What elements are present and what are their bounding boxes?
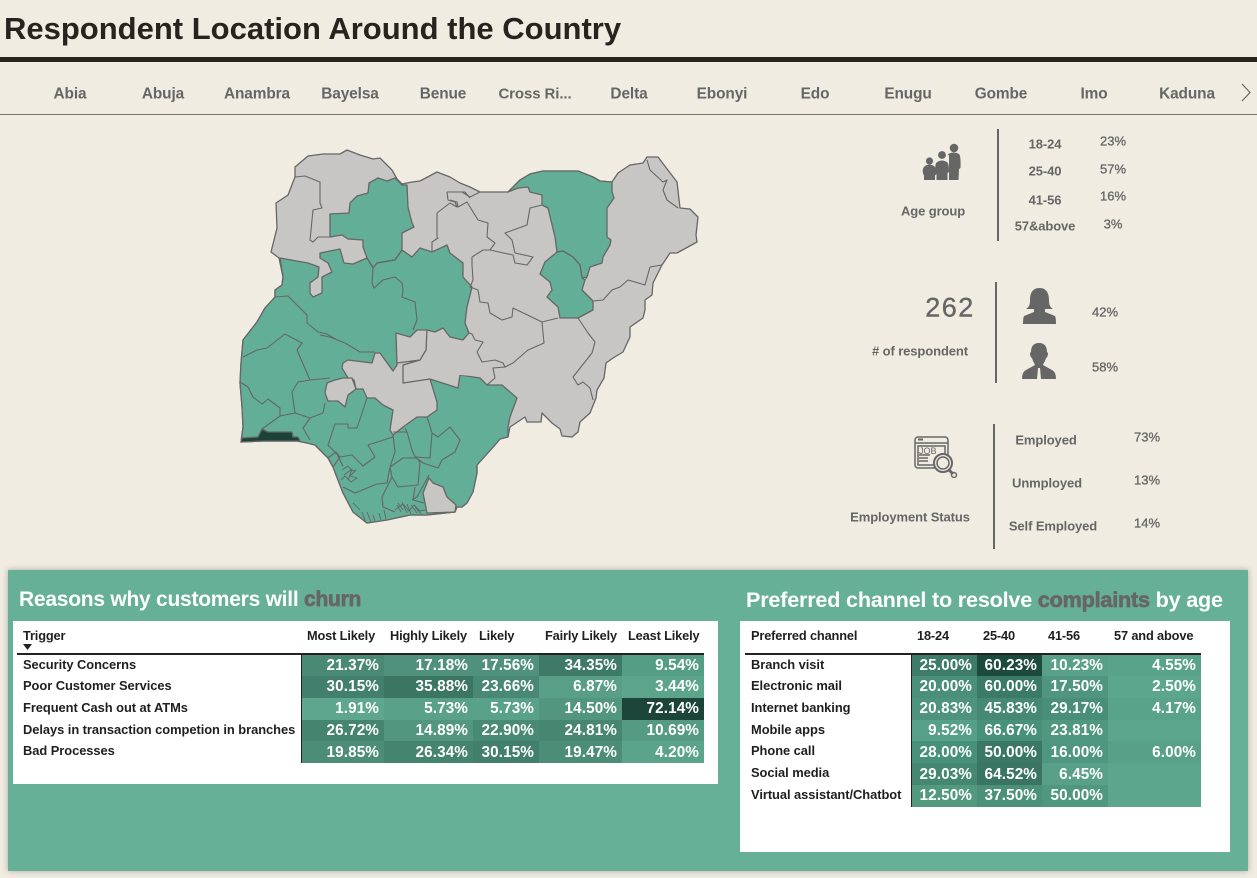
panel: churn table: 4.20% — [655, 744, 699, 761]
label: employment status: Employment Status — [850, 510, 970, 524]
panel: churn table: 35.88% — [416, 678, 468, 695]
state slicer tabs: Delta — [610, 85, 648, 102]
panel: complaints table: 4.17% — [1152, 700, 1196, 717]
panel: churn table: Most Likely — [307, 628, 375, 643]
panel: churn table: Bad Processes — [23, 743, 115, 758]
icon: man — [1022, 343, 1056, 379]
state slicer tabs: Abuja — [142, 85, 184, 102]
panel: tables background — [8, 570, 1248, 871]
heading: complaints: Preferred channel to resolve complaints by age — [746, 587, 1223, 612]
row: self employed: Self Employed — [1009, 518, 1097, 534]
map: Nigeria states — [239, 149, 699, 524]
panel: complaints table: 20.00% — [920, 678, 972, 695]
divider — [993, 424, 995, 549]
panel: complaints table: 29.17% — [1051, 700, 1103, 717]
state slicer tabs: Enugu — [884, 85, 932, 102]
panel: complaints table: 4.55% — [1152, 657, 1196, 674]
age group block: 23% — [1100, 134, 1126, 148]
row: 18-24: 18-24 — [1029, 136, 1061, 152]
panel: complaints table: Mobile apps — [751, 722, 825, 737]
panel: complaints table: 6.00% — [1152, 744, 1196, 761]
panel: churn table: 5.73% — [424, 700, 468, 717]
panel: churn table: 17.56% — [482, 657, 534, 674]
dark highlight: Lagos — [241, 429, 300, 442]
panel: complaints table: Phone call — [751, 743, 815, 758]
label: age group: Age group — [901, 204, 965, 218]
panel: churn table: 24.81% — [565, 722, 617, 739]
panel: churn table: 26.34% — [416, 744, 468, 761]
panel: churn table — [13, 621, 718, 784]
icon: family — [922, 144, 961, 180]
panel: complaints table: 45.83% — [985, 700, 1037, 717]
state slicer tabs: Bayelsa — [321, 85, 379, 102]
panel: complaints table: 10.23% — [1051, 657, 1103, 674]
gray: south-west inland state — [325, 378, 356, 407]
green: south-west and central states — [240, 245, 517, 523]
panel: complaints table: 20.83% — [920, 700, 972, 717]
panel: complaints table: 12.50% — [920, 787, 972, 804]
panel: complaints table: 29.03% — [920, 766, 972, 783]
panel: churn table: 6.87% — [573, 678, 617, 695]
respondent block — [872, 282, 1118, 383]
state slicer tabs: Edo — [801, 85, 829, 102]
panel: churn table: Trigger — [23, 628, 65, 643]
share: men: 58% — [1092, 360, 1118, 374]
age group block: 16% — [1100, 188, 1126, 204]
panel: complaints table: 18-24 — [917, 628, 949, 643]
panel: complaints table: 60.00% — [985, 678, 1037, 695]
country base shape — [240, 150, 698, 523]
state slicer tabs: Ebonyi — [697, 85, 747, 102]
panel: complaints table: 37.50% — [985, 787, 1037, 804]
row: unemployed: Unmployed — [1012, 476, 1082, 490]
age group block: 3% — [1104, 216, 1122, 232]
panel: churn table: 19.85% — [327, 744, 379, 761]
divider — [997, 129, 999, 241]
row: employed: Employed — [1015, 432, 1077, 448]
panel: complaints table: Electronic mail — [751, 678, 842, 693]
respondent count: 262 — [925, 292, 975, 322]
employment block: 73% — [1134, 430, 1160, 444]
row: 25-40: 25-40 — [1029, 164, 1061, 178]
panel: churn table: 23.66% — [482, 678, 534, 695]
state slicer tabs: Anambra — [224, 85, 290, 102]
panel: complaints table — [740, 621, 1230, 852]
panel: churn table: 30.15% — [482, 744, 534, 761]
state slicer tabs: Cross Ri... — [498, 86, 572, 102]
share: women: 42% — [1092, 304, 1118, 320]
state slicer tabs: Benue — [420, 85, 466, 102]
panel: churn table: 26.72% — [327, 722, 379, 739]
panel: churn table: Security Concerns — [23, 657, 136, 672]
panel: churn table: 19.47% — [565, 744, 617, 761]
title rule — [0, 57, 1257, 62]
panel: complaints table: 6.45% — [1059, 766, 1103, 783]
panel: churn table: 1.91% — [335, 700, 379, 717]
panel: churn table: 22.90% — [482, 722, 534, 739]
panel: churn table: 14.89% — [416, 722, 468, 739]
green: north-central state — [330, 178, 414, 268]
panel: complaints table: 60.23% — [985, 657, 1037, 674]
panel: churn table: 30.15% — [327, 678, 379, 695]
heading: churn: Reasons why customers will churn — [19, 588, 361, 611]
green: north-east state — [508, 171, 614, 278]
panel: complaints table: 57 and above — [1114, 628, 1193, 643]
panel: churn table: Highly Likely — [390, 628, 467, 643]
panel: complaints table: 66.67% — [985, 722, 1037, 739]
age group block: 57% — [1100, 162, 1126, 176]
state slicer tabs: Imo — [1080, 85, 1108, 102]
row: 57 and above: 57&above — [1015, 218, 1075, 234]
gray: southern state — [423, 478, 456, 513]
panel: complaints table: 16.00% — [1051, 744, 1103, 761]
panel: complaints table: 28.00% — [920, 744, 972, 761]
state slicer tabs: Gombe — [975, 85, 1027, 102]
title: Respondent Location Around the Country — [4, 11, 621, 46]
age group block — [901, 129, 1126, 241]
panel: churn table: 5.73% — [490, 700, 534, 717]
state slicer tabs: Kaduna — [1159, 85, 1215, 102]
panel: churn table: 21.37% — [327, 657, 379, 674]
panel: complaints table: 50.00% — [985, 744, 1037, 761]
panel: complaints table: 50.00% — [1051, 787, 1103, 804]
panel: complaints table: Internet banking — [751, 700, 850, 715]
panel: complaints table: 25.00% — [920, 657, 972, 674]
panel: complaints table: 41-56 — [1048, 628, 1080, 643]
icon: job search — [914, 436, 958, 478]
label: respondents: # of respondent — [872, 344, 968, 358]
gray: central states — [342, 328, 472, 435]
state slicer tabs — [0, 62, 1257, 115]
panel: complaints table: 2.50% — [1152, 678, 1196, 695]
icon: job search: JOB — [919, 446, 937, 456]
panel: complaints table: Social media — [751, 765, 829, 780]
panel: churn table: 9.54% — [655, 657, 699, 674]
panel: churn table: Likely — [479, 628, 514, 643]
panel: complaints table: 17.50% — [1051, 678, 1103, 695]
panel: complaints table: 23.81% — [1051, 722, 1103, 739]
row: 41-56: 41-56 — [1029, 192, 1061, 208]
panel: churn table: 3.44% — [655, 678, 699, 695]
employment block: 13% — [1134, 472, 1160, 488]
panel: churn table: Delays in transaction competion in branches — [23, 722, 295, 737]
panel: complaints table: Preferred channel — [751, 628, 857, 643]
panel: churn table: 72.14% — [647, 700, 699, 717]
panel: complaints table: 25-40 — [983, 628, 1015, 643]
river delta details — [341, 466, 425, 523]
panel: churn table: Frequent Cash out at ATMs — [23, 700, 188, 715]
employment block: 14% — [1134, 516, 1160, 530]
icon: woman — [1023, 288, 1056, 324]
state borders — [240, 160, 678, 512]
panel: churn table: Least Likely — [628, 628, 699, 643]
panel: churn table: 14.50% — [565, 700, 617, 717]
panel: churn table: Fairly Likely — [545, 628, 617, 643]
divider — [995, 282, 997, 383]
panel: churn table: Poor Customer Services — [23, 678, 172, 693]
panel: complaints table: Branch visit — [751, 657, 824, 672]
panel: complaints table: Virtual assistant/Chatbot — [751, 787, 901, 802]
panel: churn table: 10.69% — [647, 722, 699, 739]
panel: complaints table: 9.52% — [928, 722, 972, 739]
panel: churn table: 17.18% — [416, 657, 468, 674]
panel: churn table: 34.35% — [565, 657, 617, 674]
green: eastern state — [540, 251, 593, 318]
panel: complaints table: 64.52% — [985, 766, 1037, 783]
state slicer tabs: Abia — [54, 85, 86, 102]
employment block — [850, 424, 1160, 549]
